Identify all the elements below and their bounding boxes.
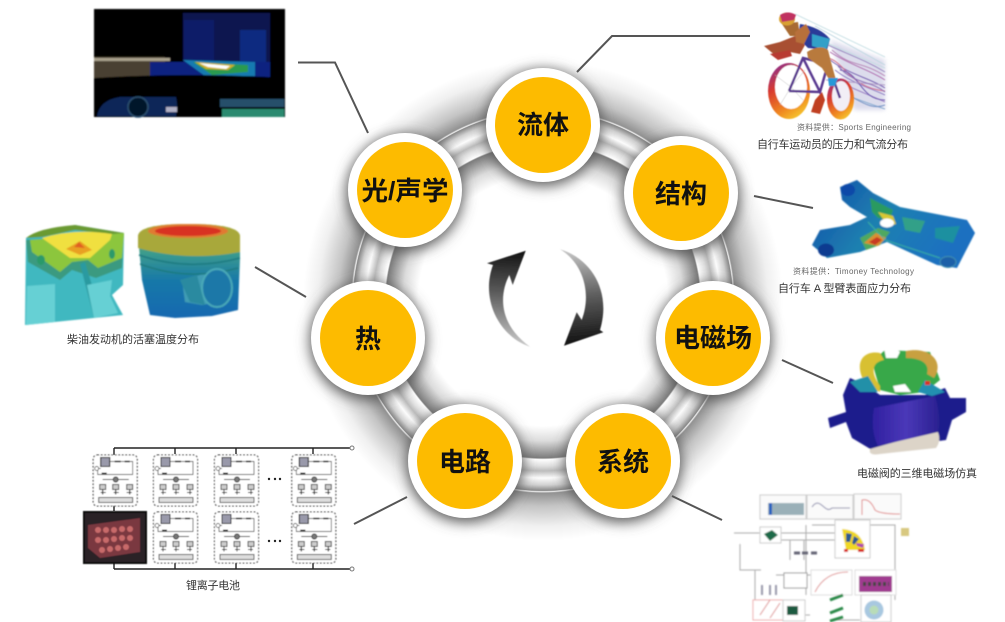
panel: A-arm stress image — [812, 180, 975, 268]
head and helmet — [782, 22, 800, 36]
lower inverter — [753, 600, 783, 620]
ring connecting the seven physics nodes — [303, 61, 783, 541]
arrow: right, pointing down — [560, 249, 603, 346]
motor circle — [861, 595, 891, 622]
node: 热 — [310, 281, 426, 399]
left piston cutaway — [25, 225, 124, 325]
bicycle and rider — [764, 12, 854, 120]
node: 系统: 系统 — [597, 447, 649, 477]
node: 结构: 结构 — [655, 179, 707, 209]
text: solenoid valve caption: 电磁阀的三维电磁场仿真 — [857, 466, 977, 480]
icon: cycle arrows — [487, 249, 603, 347]
schematic wiring — [734, 525, 895, 620]
cream base — [870, 430, 939, 454]
gate block — [784, 573, 807, 588]
node: 系统 — [565, 404, 681, 522]
winding map — [855, 570, 896, 595]
small indicator — [901, 528, 909, 536]
ellipsis between columns — [268, 478, 281, 542]
panel: cyclist airflow image — [764, 12, 885, 120]
node: 电磁场: 电磁场 — [674, 323, 752, 353]
node: 结构 — [623, 136, 739, 254]
frame — [789, 58, 840, 98]
node: 光/声学: 光/声学 — [362, 176, 448, 206]
node: 流体: 流体 — [517, 110, 569, 140]
motor quadrant — [835, 520, 870, 558]
text: A-arm caption: 自行车 A 型臂表面应力分布 — [778, 281, 911, 295]
leader lines — [255, 36, 833, 524]
bus lines — [114, 448, 352, 569]
terminals — [350, 446, 354, 571]
panel: system schematic image — [734, 494, 909, 622]
diodes — [794, 552, 817, 554]
node: 流体 — [485, 68, 601, 186]
battery pack photo — [83, 511, 147, 564]
legs — [807, 47, 836, 84]
text: cyclist caption: 自行车运动员的压力和气流分布 — [757, 137, 908, 151]
node: 电磁场 — [655, 281, 771, 399]
coil — [873, 396, 939, 446]
battery modules, row one and two — [93, 455, 336, 563]
schematic scopes — [760, 495, 806, 519]
panel: lithium battery pack circuit — [83, 446, 354, 571]
inverter board — [760, 527, 781, 543]
text: piston caption: 柴油发动机的活塞温度分布 — [67, 332, 199, 346]
dark blue field cloud — [828, 378, 966, 450]
speed curve — [811, 570, 852, 595]
panel: piston temperature images — [25, 224, 240, 325]
right piston — [138, 224, 240, 318]
text: source credit Timoney Technology: 资料提供：Timoney Technology — [793, 266, 914, 276]
node: 电路 — [407, 404, 523, 522]
text: source credit Sports Engineering: 资料提供：Sports Engineering — [797, 122, 911, 132]
airflow streamlines — [795, 14, 885, 109]
panel: headlight night view image — [94, 9, 285, 117]
torso — [798, 24, 830, 50]
text: battery caption: 锂离子电池 — [186, 578, 240, 592]
node: 光/声学 — [347, 133, 463, 251]
node: 热: 热 — [355, 324, 381, 354]
arms — [764, 36, 805, 56]
green and yellow field loops — [872, 350, 940, 395]
green transformers — [830, 595, 843, 621]
front wheel — [768, 63, 810, 119]
panel: solenoid valve simulation image — [828, 346, 966, 454]
rear wheel — [827, 78, 854, 120]
airflow haze — [830, 40, 885, 110]
node: 电路: 电路 — [439, 447, 491, 477]
arrow: left, pointing up — [487, 251, 530, 347]
